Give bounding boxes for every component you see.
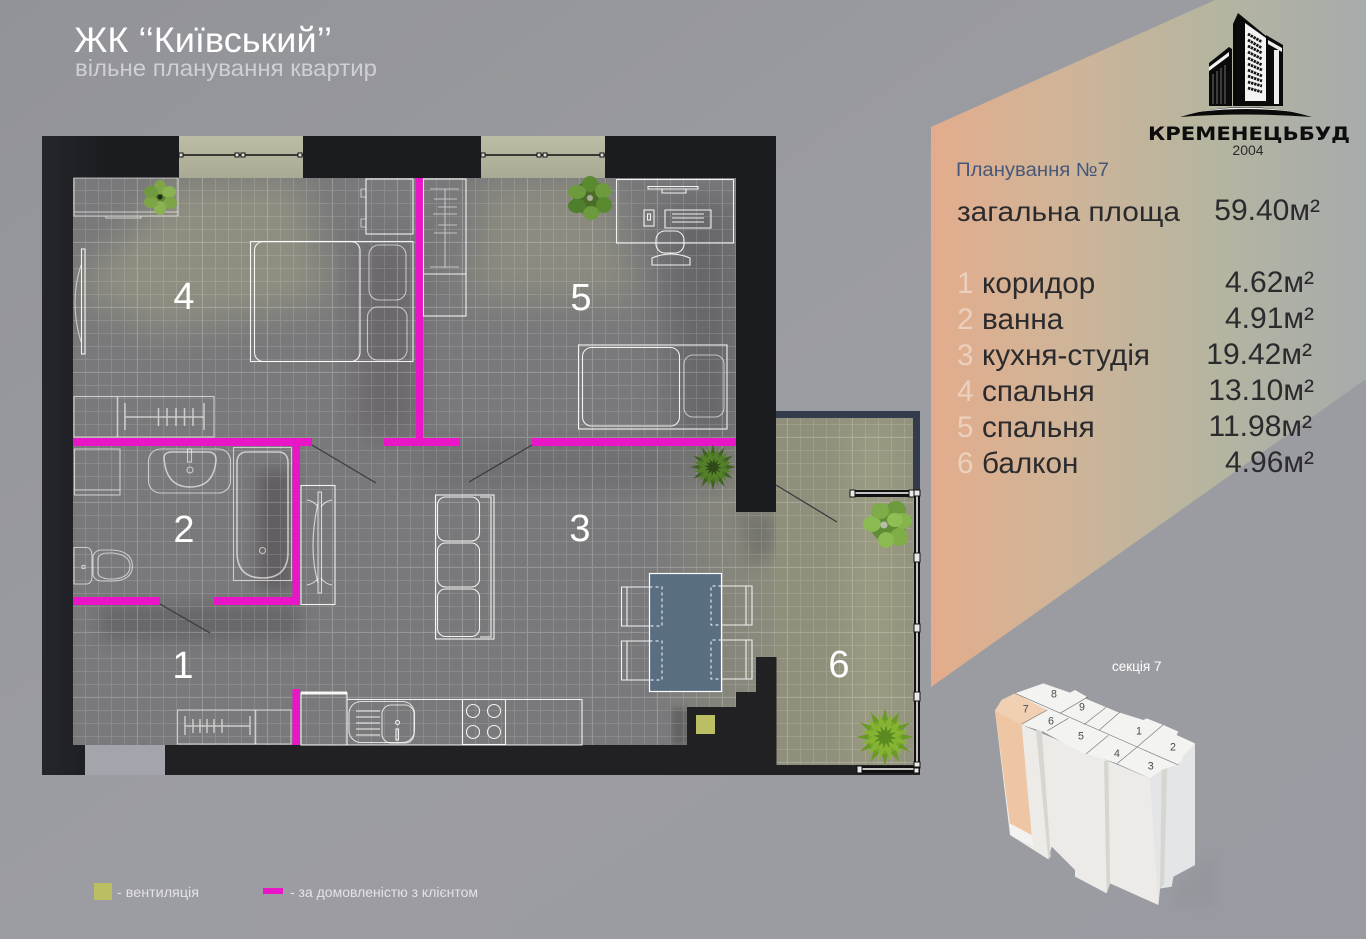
room list: 6 — [957, 447, 974, 480]
legend: ventilation: - вентиляція — [117, 884, 199, 900]
room list: спальня — [982, 411, 1095, 444]
balcony window frame — [850, 490, 920, 773]
furniture: hob — [462, 700, 506, 744]
room list: 13.10м² — [1208, 374, 1314, 407]
furniture: nightstand — [361, 179, 413, 234]
room list: балкон — [982, 447, 1078, 480]
room numbers — [172, 276, 850, 687]
total area: 59.40м² — [1214, 194, 1320, 227]
furniture: corridor wardrobe — [178, 710, 291, 744]
section numbers: 7 — [1023, 704, 1029, 716]
room list: 1 — [957, 267, 974, 300]
window 2 — [481, 136, 605, 178]
icon: spiky plant on balcony — [854, 706, 916, 768]
furniture: bathtub — [234, 448, 292, 580]
panel: apartment summary — [931, 0, 1366, 687]
room list: кухня-студія — [982, 339, 1150, 372]
total area: загальна площа — [957, 196, 1180, 227]
logo year: 2004 — [1232, 142, 1264, 158]
icon: ventilation shaft — [696, 715, 715, 734]
building shadow — [1173, 850, 1217, 907]
section numbers: 6 — [1048, 716, 1054, 728]
room list: 4 — [957, 375, 974, 408]
floor plan — [42, 136, 920, 775]
furniture: dining table with chairs — [622, 574, 752, 692]
icon: buildings — [1180, 13, 1312, 117]
section numbers: 8 — [1051, 689, 1057, 701]
section numbers: 5 — [1078, 731, 1084, 743]
furniture: toilet — [74, 548, 132, 584]
room list — [957, 266, 1314, 480]
section numbers: 9 — [1079, 702, 1085, 714]
plan number heading: Планування №7 — [956, 160, 1109, 181]
floor: balcony — [776, 418, 913, 765]
section numbers: 1 — [1136, 726, 1142, 738]
furniture: desk — [616, 180, 734, 265]
room list: 3 — [957, 339, 974, 372]
room list: 19.42м² — [1206, 338, 1312, 371]
legend: by agreement with client: - за домовленістю з клієнтом — [290, 884, 478, 900]
icon: plant small on shelf — [144, 180, 177, 215]
room numbers: 6 — [828, 644, 850, 686]
movable partitions (magenta) — [73, 178, 736, 745]
furniture: kitchen unit — [301, 693, 582, 745]
section label: секція 7 — [1112, 659, 1161, 674]
room numbers: 1 — [172, 645, 194, 687]
section numbers: 3 — [1148, 761, 1154, 773]
walls — [42, 136, 179, 775]
section numbers: 2 — [1170, 742, 1176, 754]
section numbers — [1023, 689, 1176, 773]
room list: 11.98м² — [1209, 410, 1312, 443]
soft shadow under plan — [85, 745, 165, 775]
furniture: sofa — [436, 495, 494, 639]
room list: 4.91м² — [1225, 302, 1314, 335]
room list: 4.96м² — [1225, 446, 1314, 479]
right side face — [1150, 743, 1195, 905]
furniture: room 4 wardrobe shelf — [74, 178, 178, 218]
room numbers: 3 — [569, 508, 591, 550]
facade grooves — [1036, 728, 1167, 893]
room list: спальня — [982, 375, 1095, 408]
door swings — [160, 445, 837, 633]
room list: ванна — [982, 303, 1064, 336]
room numbers: 5 — [570, 277, 592, 319]
room list: 4.62м² — [1225, 266, 1314, 299]
highlighted section facade (7) — [995, 711, 1032, 835]
building body — [995, 711, 1195, 905]
furniture: bed room 4 — [250, 242, 413, 362]
icon: leafy plant on balcony — [863, 501, 912, 548]
section diagram: building — [995, 683, 1217, 907]
floor: apartment — [73, 178, 780, 745]
furniture: wardrobe room 5 — [424, 179, 466, 316]
logo — [1148, 13, 1350, 158]
room list: 2 — [957, 303, 974, 336]
icon: plant room 5 — [568, 176, 612, 220]
title: ЖК ‘‘Київський’’ — [74, 21, 332, 60]
furniture: washer — [74, 449, 120, 495]
furniture: wash basin — [148, 449, 230, 493]
room numbers: 2 — [173, 509, 195, 551]
furniture: kitchen sink — [349, 702, 414, 743]
total area — [957, 194, 1320, 227]
furniture: wardrobe room 4 — [74, 396, 214, 437]
furniture: room 4 tv — [75, 249, 85, 354]
top face — [995, 683, 1195, 778]
window 1 — [179, 136, 303, 178]
icon: spiky plant room 3 — [689, 443, 737, 491]
subtitle: вільне планування квартир — [75, 55, 377, 81]
section dividers — [1015, 693, 1178, 765]
furniture: corridor tv — [301, 486, 335, 604]
section numbers: 4 — [1114, 748, 1120, 760]
room numbers: 4 — [173, 276, 195, 318]
furniture: bed room 5 — [578, 345, 727, 429]
highlighted section top (7) — [995, 693, 1047, 725]
room list: 5 — [957, 411, 974, 444]
logo name: КРЕМЕНЕЦЬБУД — [1148, 123, 1350, 145]
room list: коридор — [982, 267, 1095, 300]
balcony parapet — [776, 411, 920, 492]
